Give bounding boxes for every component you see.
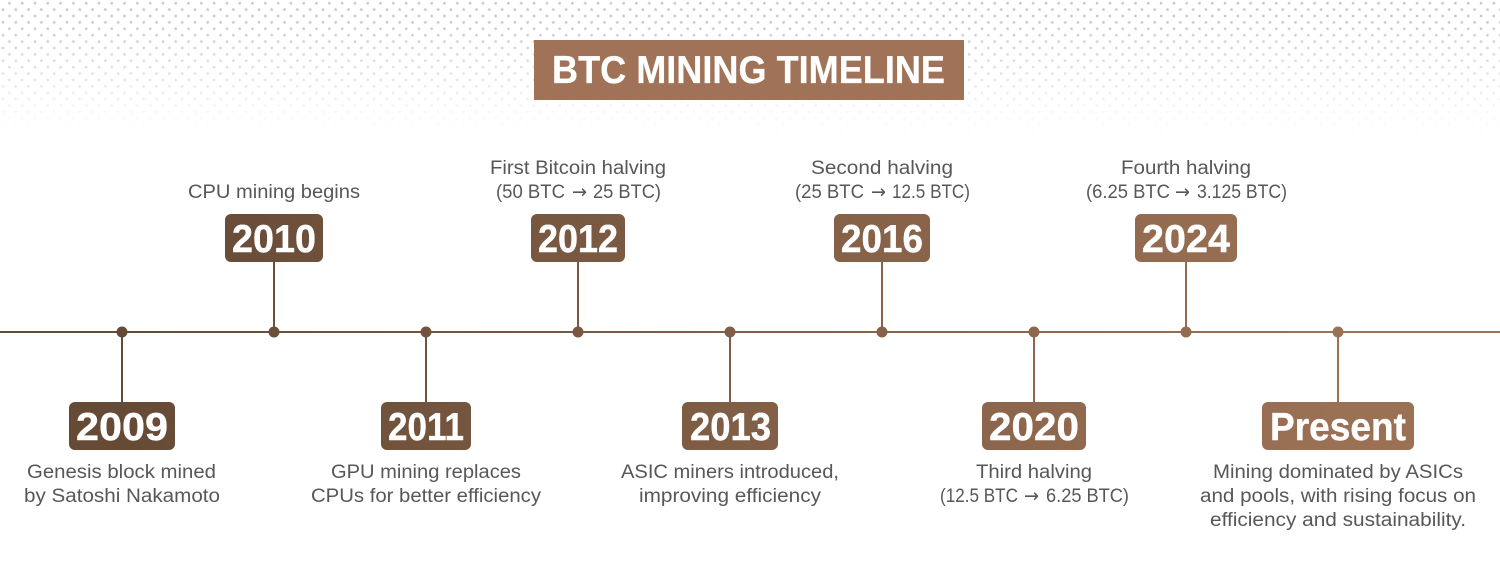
milestone: 2012: First Bitcoin halving	[490, 158, 666, 179]
milestone: 2024: 2024	[1142, 218, 1230, 261]
milestone: Present: Present	[1270, 406, 1406, 449]
milestone: Present: efficiency and sustainability.	[1210, 510, 1466, 531]
milestone: 2024: (6.25 BTC	[1086, 182, 1170, 203]
milestone: 2016: 2016	[841, 218, 923, 261]
milestone: 2012: 25 BTC)	[593, 182, 661, 203]
milestone: 2009: Genesis block mined	[27, 462, 216, 483]
milestone: Present: Mining dominated by ASICs	[1213, 462, 1463, 483]
milestone: 2011: GPU mining replaces	[331, 462, 521, 483]
title banner	[534, 40, 964, 100]
milestone: 2024	[1086, 158, 1287, 338]
milestone: 2011	[311, 326, 542, 507]
milestone: 2012: →	[572, 181, 587, 203]
milestone: 2020: 2020	[989, 406, 1079, 449]
milestone: 2010: 2010	[232, 218, 316, 261]
milestone: 2016: →	[871, 181, 886, 203]
milestone: 2016: Second halving	[811, 158, 953, 179]
milestone: 2013: improving efficiency	[639, 486, 822, 507]
milestone: 2009: by Satoshi Nakamoto	[24, 486, 220, 507]
milestone: 2016: (25 BTC	[795, 182, 864, 203]
milestone: 2013: 2013	[690, 406, 771, 449]
milestone: 2009	[24, 326, 220, 507]
milestone: 2012: 2012	[538, 218, 618, 261]
milestone: 2020: Third halving	[976, 462, 1092, 483]
milestone: 2020: 6.25 BTC)	[1046, 486, 1129, 507]
milestone: 2011: CPUs for better efficiency	[311, 486, 542, 507]
milestone: 2020: →	[1024, 485, 1039, 507]
milestone: Present: and pools, with rising focus on	[1200, 486, 1476, 507]
milestone: 2013	[621, 326, 839, 507]
title banner: BTC MINING TIMELINE	[552, 49, 945, 92]
milestone: 2012	[490, 158, 666, 338]
milestone: 2020	[940, 326, 1129, 507]
milestone: 2024: →	[1175, 181, 1190, 203]
timeline axis	[0, 331, 1500, 333]
milestone: 2011: 2011	[388, 406, 464, 449]
milestone: 2020: (12.5 BTC	[940, 486, 1018, 507]
milestone: 2024: 3.125 BTC)	[1197, 182, 1287, 203]
milestone: Present	[1200, 326, 1476, 531]
milestone: 2010: CPU mining begins	[188, 182, 360, 203]
milestone: 2012: (50 BTC	[496, 182, 565, 203]
milestone: 2009: 2009	[76, 406, 168, 449]
milestone: 2016	[795, 158, 970, 338]
milestone: 2016: 12.5 BTC)	[892, 182, 970, 203]
milestone: 2013: ASIC miners introduced,	[621, 462, 839, 483]
milestone: 2024: Fourth halving	[1121, 158, 1251, 179]
milestone: 2010	[188, 182, 360, 338]
